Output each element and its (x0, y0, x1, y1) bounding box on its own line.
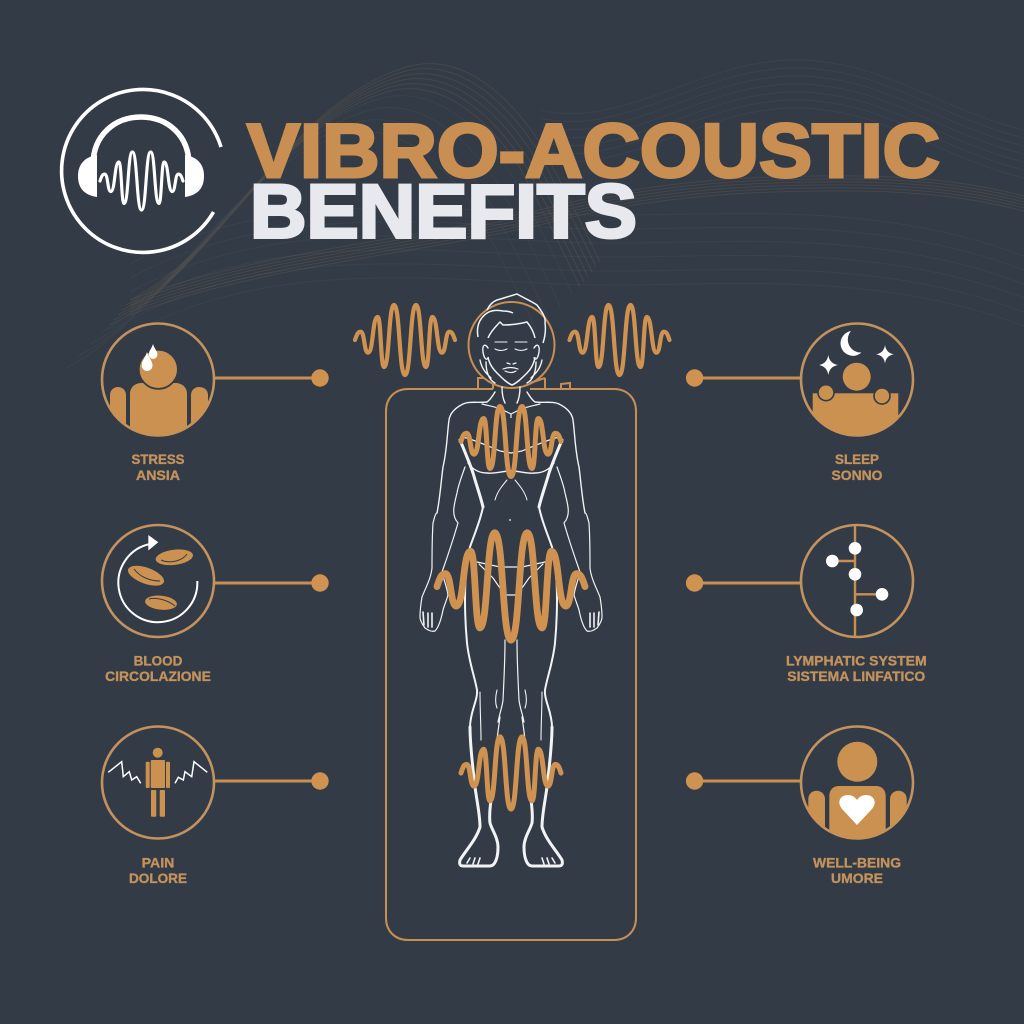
title: VIBRO-ACOUSTIC (247, 109, 940, 194)
wave: legs (461, 737, 561, 809)
label: well-being: WELL-BEING (813, 854, 901, 870)
label: well-being (813, 854, 901, 886)
wave: top right (570, 305, 670, 375)
panel: lymphatic system (686, 525, 927, 684)
connector: pain (214, 772, 329, 790)
connector: sleep (686, 369, 801, 387)
label: lymphatic system (786, 652, 927, 684)
title (247, 109, 940, 254)
panel: pain (102, 726, 329, 886)
label: stress: ANSIA (136, 467, 180, 483)
panel: well-being (686, 726, 913, 886)
label: pain: DOLORE (129, 870, 187, 886)
logo: headphones with sound wave in open ring (62, 89, 221, 252)
wave: hips (437, 533, 585, 640)
icon: blood cells with circulation arrow (102, 525, 214, 637)
human body line drawing (420, 294, 602, 866)
label: stress: STRESS (132, 451, 184, 467)
wave: top left (355, 305, 455, 375)
connector: stress (214, 369, 329, 387)
label: pain: PAIN (142, 854, 174, 870)
label: lymphatic system: SISTEMA LINFATICO (787, 668, 925, 684)
connector: well-being (686, 772, 801, 790)
label: sleep: SONNO (832, 467, 883, 483)
label: well-being: UMORE (831, 870, 883, 886)
title: BENEFITS (250, 170, 637, 254)
panel: stress (102, 324, 329, 483)
icon: lymphatic nodes (801, 525, 913, 637)
label: blood: CIRCOLAZIONE (105, 668, 211, 684)
background sound-wave line mesh (66, 60, 1024, 368)
icon: stressed person with sweat drops (102, 324, 214, 440)
mat outline with head ring (386, 302, 636, 940)
label: lymphatic system: LYMPHATIC SYSTEM (786, 652, 927, 668)
panel: sleep (686, 324, 913, 483)
icon: sleeping person with moon and stars (801, 324, 913, 443)
label: blood: BLOOD (134, 652, 182, 668)
wave: chest (461, 406, 561, 476)
label: pain (129, 854, 187, 886)
label: sleep (832, 451, 883, 483)
icon: person with pain zigzags (102, 726, 214, 838)
label: sleep: SLEEP (835, 451, 879, 467)
connector: blood (214, 574, 329, 592)
icon: person with heart (801, 726, 913, 845)
connector: lymphatic (686, 574, 801, 592)
label: blood (105, 652, 211, 684)
panel: blood (102, 525, 329, 684)
label: stress (132, 451, 184, 483)
